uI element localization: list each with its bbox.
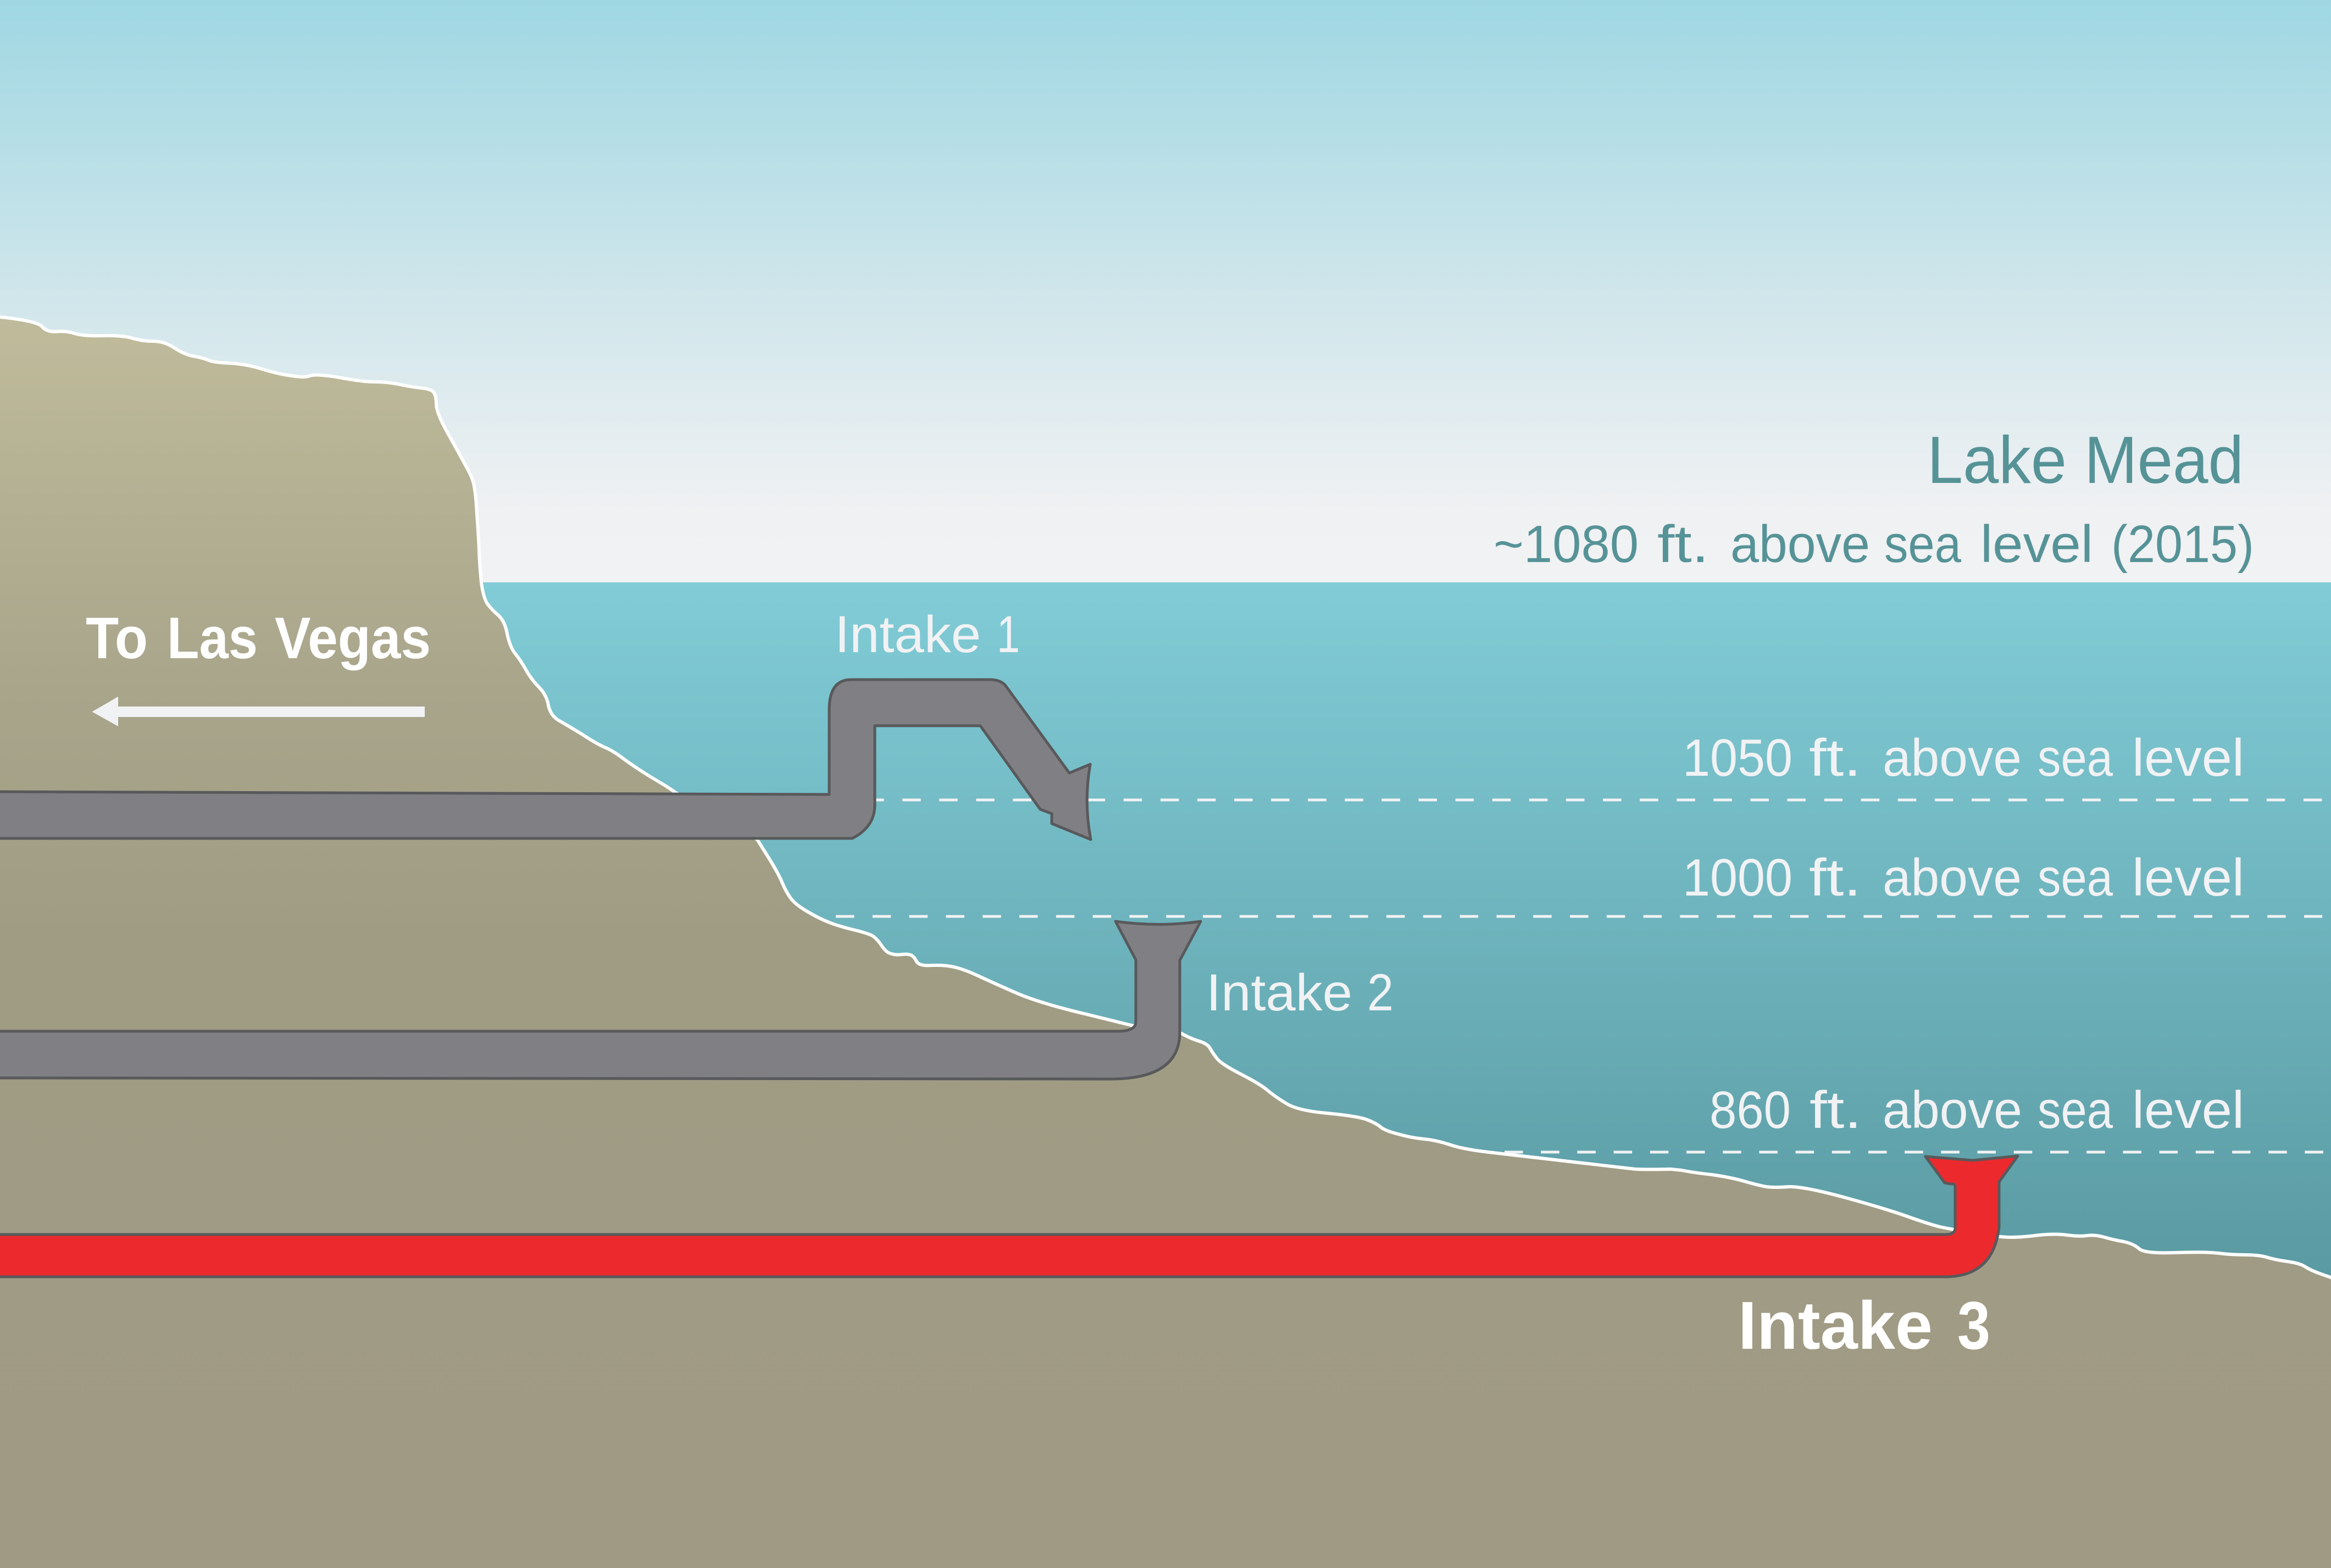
heading: Lake Mead — [1927, 422, 2244, 497]
label: 860 ft level: ft. — [1810, 1081, 1862, 1139]
label: 860 ft level: sea — [2038, 1081, 2113, 1139]
label: Intake 3: Intake — [1738, 1288, 1933, 1364]
1000 ft dashed line — [836, 915, 2322, 918]
label: 1000 ft level: above — [1883, 848, 2022, 907]
label: current lake level: above — [1730, 515, 1870, 574]
label: 1050 ft level: ft. — [1809, 729, 1861, 787]
label: current lake level: (2015) — [2111, 515, 2254, 574]
pipe: intake 3 (red) — [0, 1156, 2018, 1277]
860 ft dashed line — [1505, 1150, 2323, 1154]
label: 1000 ft level: level — [2132, 848, 2244, 907]
label: 860 ft level — [1710, 1081, 2244, 1139]
label: To Las Vegas — [86, 605, 431, 671]
label: 1000 ft level: sea — [2038, 848, 2113, 907]
label: To Las Vegas: To — [86, 605, 148, 671]
label: current lake level: level — [1980, 515, 2093, 574]
label: 860 ft level: level — [2132, 1081, 2244, 1139]
pipe: intake 2 — [0, 921, 1201, 1079]
heading: Lake Mead: Mead — [2084, 422, 2244, 497]
label: Intake 1: 1 — [997, 605, 1020, 664]
label: 1050 ft level: sea — [2038, 729, 2113, 787]
label: current lake level: ft. — [1657, 515, 1709, 574]
sky background — [0, 0, 2331, 582]
label: 1050 ft level — [1683, 729, 2244, 787]
label: 860 ft level: 860 — [1710, 1081, 1791, 1139]
label: Intake 1: Intake — [835, 605, 981, 664]
label: current lake level — [1494, 515, 2254, 574]
lake water — [0, 582, 2331, 1297]
canyon ground — [0, 317, 2331, 1568]
label: 1050 ft level: level — [2132, 729, 2244, 787]
heading: Lake Mead: Lake — [1927, 422, 2067, 497]
label: 1050 ft level: 1050 — [1683, 729, 1792, 787]
label: current lake level: sea — [1884, 515, 1962, 574]
label: To Las Vegas: Vegas — [275, 605, 431, 671]
label: Intake 2: Intake — [1206, 964, 1352, 1022]
label: 860 ft level: above — [1883, 1081, 2022, 1139]
1050 ft dashed line — [865, 799, 2322, 801]
label: 1000 ft level: 1000 — [1683, 848, 1792, 907]
label: 1000 ft level: ft. — [1809, 848, 1861, 907]
arrow: to Las Vegas — [92, 697, 425, 726]
label: Intake 3: 3 — [1957, 1288, 1990, 1364]
label: current lake level: ~1080 — [1494, 515, 1639, 574]
label: 1050 ft level: above — [1883, 729, 2022, 787]
label: To Las Vegas: Las — [167, 605, 258, 671]
label: 1000 ft level — [1683, 848, 2244, 907]
label: Intake 2: 2 — [1367, 964, 1394, 1022]
dashed level lines — [836, 800, 2323, 1152]
pipe: intake 1 — [0, 680, 1091, 839]
